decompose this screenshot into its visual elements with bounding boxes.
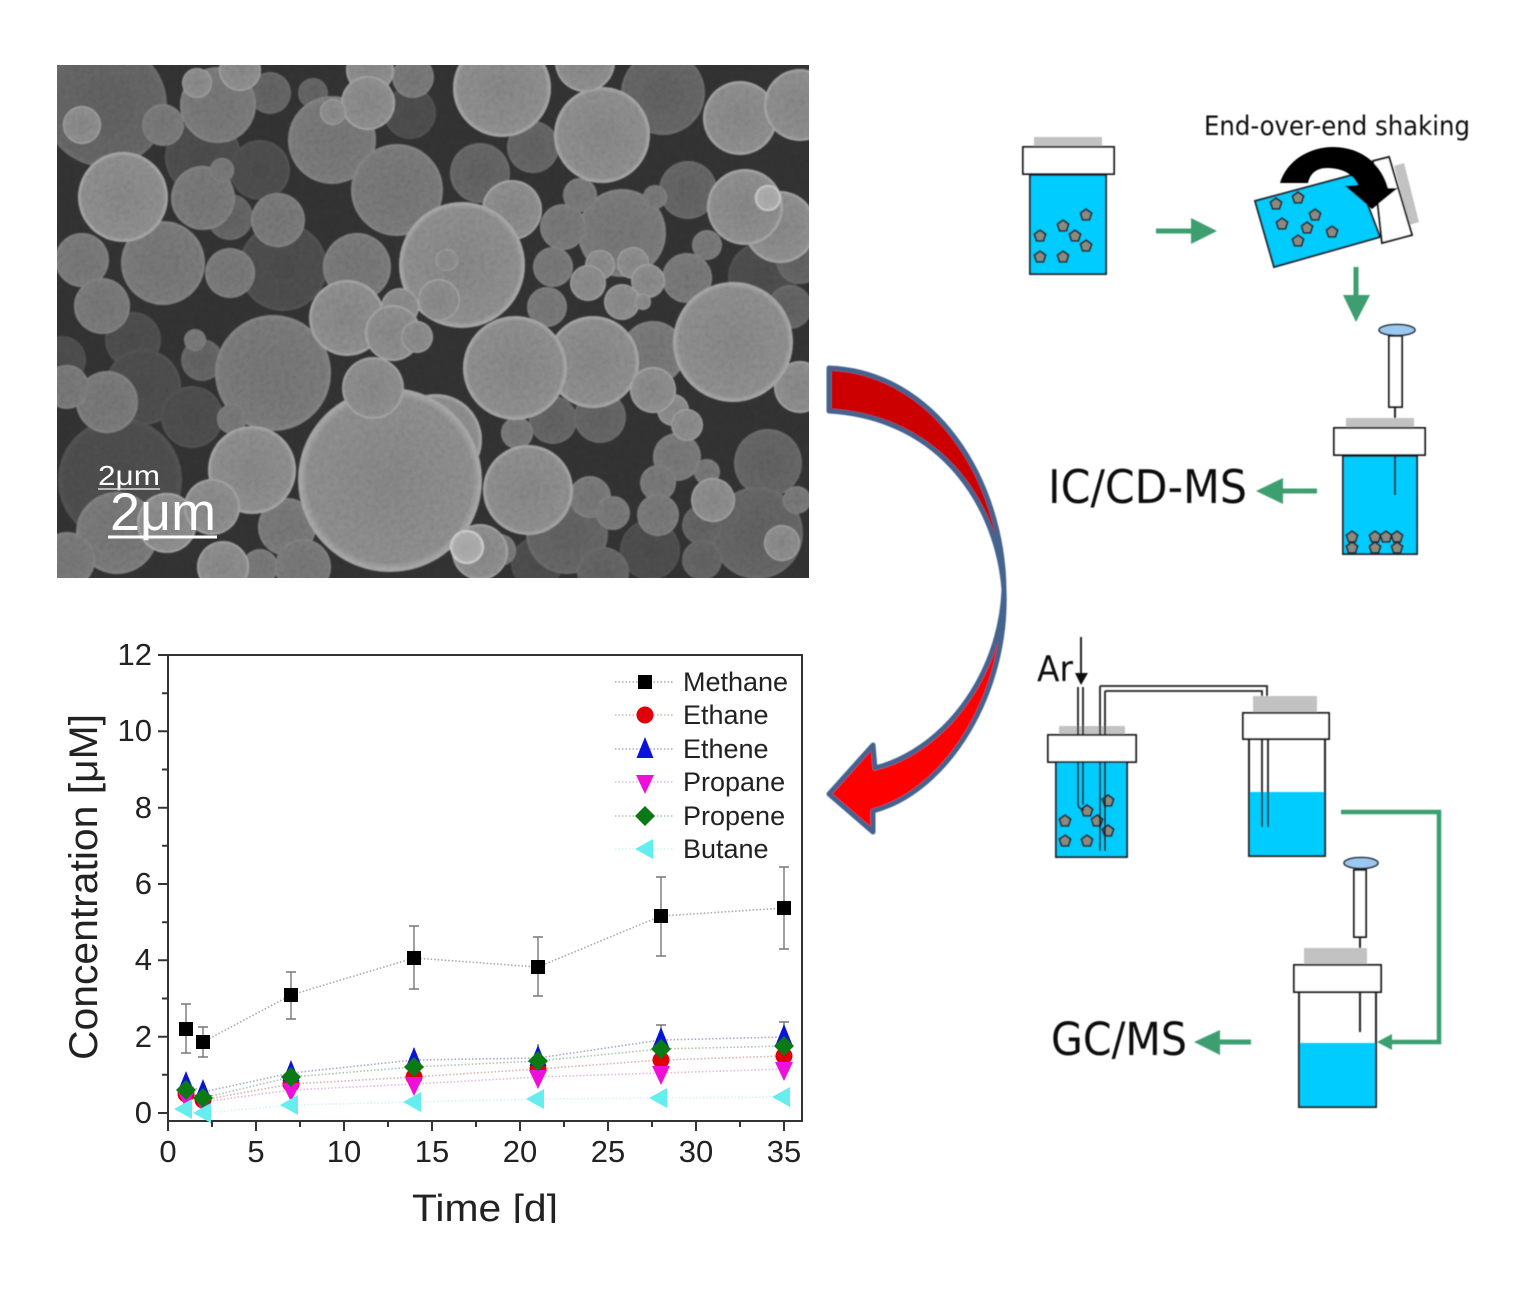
arrow: trap to headspace vial <box>1341 812 1439 1050</box>
x axis numbers: 0 <box>159 1134 177 1169</box>
arrow: to IC/CD-MS <box>1256 478 1317 504</box>
purge vial with particles and tubes <box>1048 686 1136 857</box>
y axis numbers: 0 <box>135 1095 152 1130</box>
arrow: to shaking <box>1156 218 1217 244</box>
x axis ticks <box>168 1121 784 1131</box>
scale bar label: large 2µm: 2μm <box>110 483 216 542</box>
label: GC/MS: GC/MS <box>1051 1013 1187 1066</box>
x axis numbers: 15 <box>415 1134 449 1169</box>
process scheme <box>1023 111 1470 1107</box>
headspace vial with liquid <box>1294 948 1381 1107</box>
line chart: concentration versus time <box>62 637 802 1230</box>
legend: Propene <box>683 801 785 831</box>
tilted vial being shaken <box>1255 157 1419 267</box>
icon: black curved rotation arrow <box>1280 147 1398 209</box>
y axis numbers: 8 <box>135 790 152 825</box>
syringe with sampling needle <box>1379 324 1415 428</box>
series: Ethene <box>178 1024 792 1100</box>
vial with settled particles <box>1334 418 1425 554</box>
series: Methane <box>179 901 791 1049</box>
legend: Methane <box>683 667 788 697</box>
y axis numbers <box>118 637 152 1130</box>
arrow: to GC/MS <box>1194 1030 1251 1055</box>
series: Propene <box>176 1036 794 1108</box>
plot frame <box>168 655 802 1121</box>
SEM micrograph of spherical particles <box>57 65 809 578</box>
x axis numbers: 5 <box>247 1134 265 1169</box>
x axis numbers: 35 <box>767 1134 801 1169</box>
x axis numbers: 10 <box>327 1134 361 1169</box>
y axis numbers: 4 <box>135 942 152 977</box>
series: Butane <box>174 1087 790 1123</box>
arrow upper part: dark red <box>829 368 1004 590</box>
error bars <box>181 866 789 1058</box>
label: IC/CD-MS: IC/CD-MS <box>1048 460 1247 514</box>
connecting gas tube <box>1100 686 1267 697</box>
scale bar line: small <box>98 488 160 490</box>
syringe for GC/MS sampling <box>1344 858 1378 948</box>
legend <box>615 667 788 864</box>
y axis numbers: 6 <box>135 866 152 901</box>
curved red arrow from image to chart <box>829 368 1004 832</box>
arrow: down to syringe vial <box>1343 267 1370 322</box>
y axis ticks <box>158 655 168 1113</box>
y axis numbers: 10 <box>118 713 152 748</box>
label: Ar: Ar <box>1037 649 1073 690</box>
y axis numbers: 2 <box>135 1019 152 1054</box>
legend: Propane <box>683 767 785 797</box>
legend: Ethane <box>683 700 769 730</box>
series: Propane <box>177 1062 793 1114</box>
series: Ethane <box>178 1048 792 1108</box>
x axis numbers: 20 <box>503 1134 537 1169</box>
scale bar line: large <box>108 536 217 538</box>
gas trap vial with liquid <box>1243 696 1329 856</box>
x axis numbers <box>160 1140 800 1162</box>
label: End-over-end shaking: End-over-end shaking <box>1204 111 1470 142</box>
arrow lower part: bright red with head <box>829 590 1004 832</box>
vial with particles <box>1023 137 1114 274</box>
arrow: argon inflow <box>1075 637 1088 685</box>
x axis title: Time [d] <box>412 1188 558 1230</box>
legend: Butane <box>683 834 769 864</box>
legend: Ethene <box>683 734 769 764</box>
y axis title: Concentration [μM] <box>62 714 106 1060</box>
scale bar label: small 2µm: 2μm <box>98 460 160 491</box>
x axis numbers: 30 <box>679 1134 713 1169</box>
x axis numbers: 25 <box>591 1134 625 1169</box>
series dotted lines <box>186 908 784 1113</box>
y axis numbers: 12 <box>118 637 152 672</box>
